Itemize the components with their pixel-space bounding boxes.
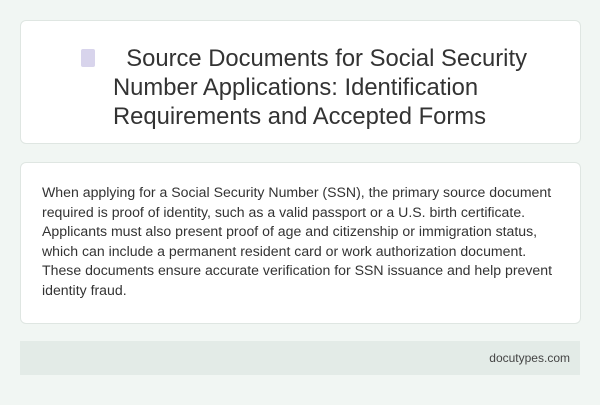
- title: Source Documents for Social Security Number Applications: Identification Requirements and Accepted Forms: [113, 45, 527, 130]
- panel: description: [20, 162, 581, 324]
- text block: When applying for a Social Security Number (SSN), the primary source document required is proof of identity, such as a valid passport or a U.S. birth certificate. Applicants must also present proof of age and citizenship or immigration status, which can include a permanent resident card or work authorization document. These documents ensure accurate verification for SSN issuance and help prevent identity fraud.: [42, 184, 552, 298]
- panel: title: [20, 20, 581, 144]
- footer text: docutypes.com: [489, 351, 570, 365]
- footer: [20, 341, 580, 375]
- icon: document: [81, 49, 95, 67]
